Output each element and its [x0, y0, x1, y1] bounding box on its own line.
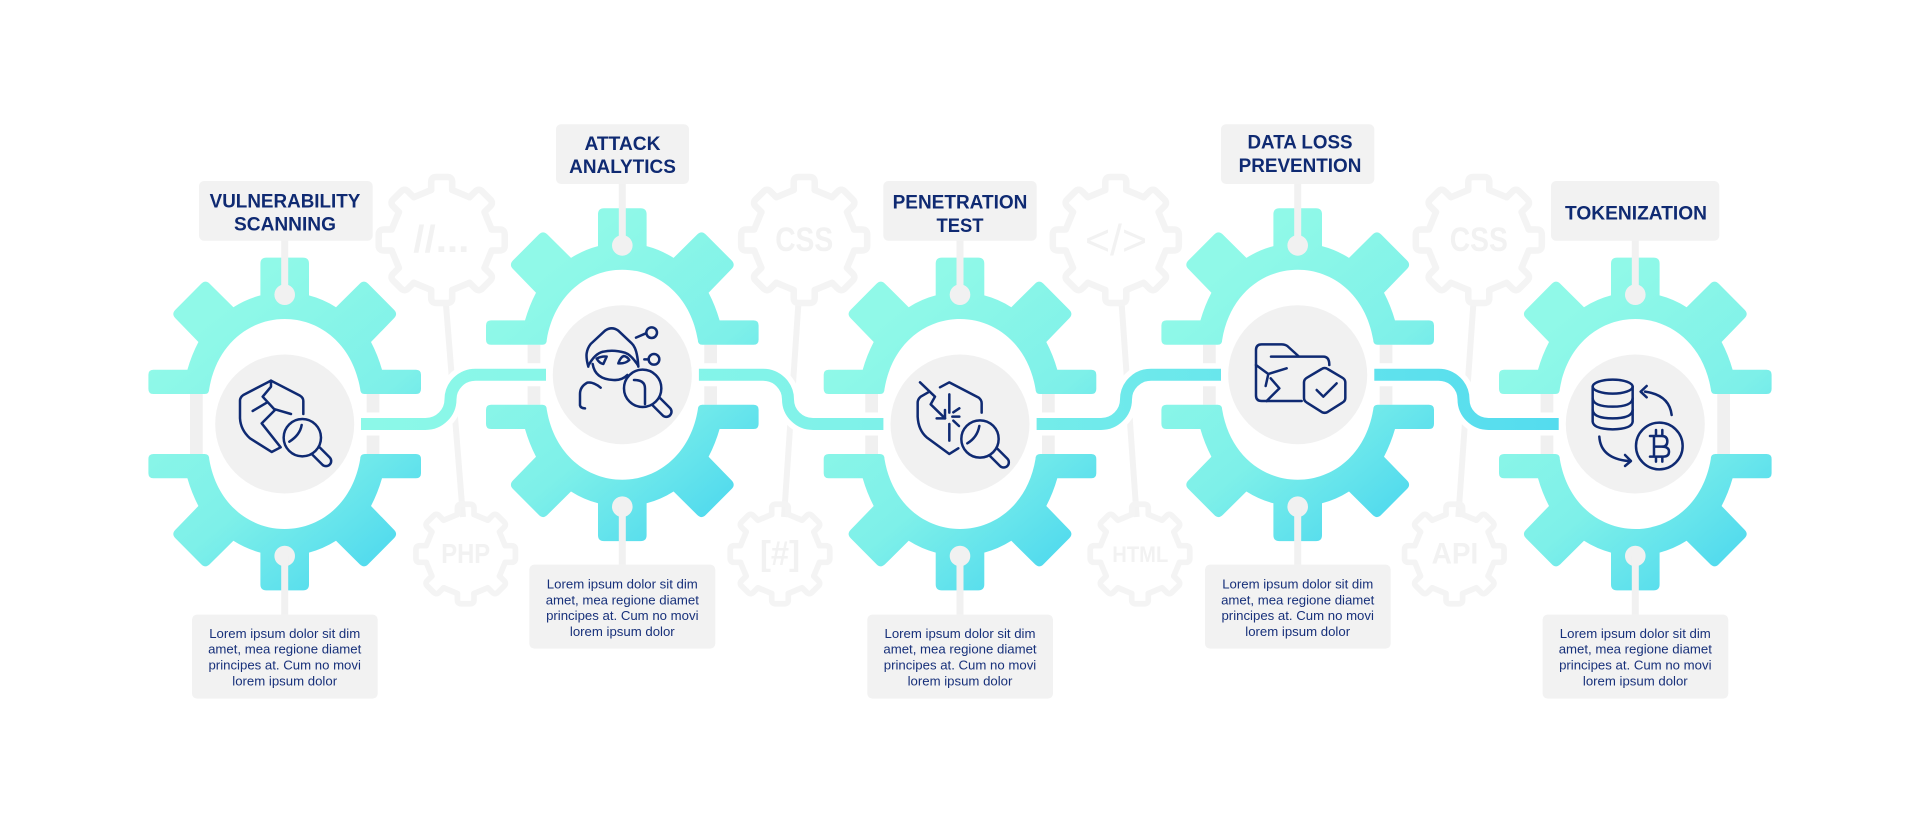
- heading: tokenization: TOKENIZATION: [1565, 203, 1707, 224]
- background gear: API: API: [1432, 538, 1478, 571]
- gear 1 center disc: [215, 354, 354, 494]
- background gear: comment syntax: //...: [413, 219, 469, 261]
- background gear: closing tag: </>: [1085, 216, 1147, 265]
- background gear link 2: [729, 176, 868, 605]
- panel: data loss prevention: [1161, 124, 1434, 649]
- icon: breached shield with magnifier: [918, 382, 1009, 468]
- panel: tokenization: [1499, 181, 1772, 699]
- connector 3 to 4: [1037, 375, 1221, 424]
- gear 3 stems and knobs: [950, 240, 970, 616]
- background gear: HTML: HTML: [1112, 542, 1168, 567]
- background gear link 3: [1052, 176, 1191, 605]
- description 3: principes at. Cum no movi: [884, 657, 1036, 672]
- connectors between gears: [361, 375, 1559, 424]
- description 5: [1543, 615, 1728, 699]
- gear 4 center disc: [1228, 305, 1367, 444]
- background gear: hash: [729, 503, 831, 605]
- connector 2 to 3: [699, 375, 883, 424]
- background gear: CSS: [740, 176, 868, 304]
- heading: attack analytics: ANALYTICS: [569, 157, 676, 178]
- description 3: lorem ipsum dolor: [908, 673, 1013, 688]
- description 1: principes at. Cum no movi: [208, 657, 361, 672]
- description 3: [867, 615, 1053, 699]
- background gear: CSS: CSS: [775, 221, 833, 259]
- heading: tokenization: [1551, 181, 1719, 241]
- description 1: amet, mea regione diamet: [208, 642, 362, 657]
- heading: penetration test: TEST: [936, 216, 984, 237]
- gear 5 stems and knobs: [1625, 240, 1646, 616]
- heading: data loss prevention: DATA LOSS: [1248, 133, 1353, 154]
- icon: hooded hacker with magnifier: [580, 327, 672, 417]
- description 2: [529, 565, 715, 649]
- description 1: lorem ipsum dolor: [232, 673, 338, 688]
- gear 3: [824, 258, 1096, 590]
- background gear: API: [1404, 503, 1505, 605]
- background gear link 4: [1404, 176, 1543, 605]
- gear 1 stems and knobs: [274, 240, 295, 616]
- heading: data loss prevention: PREVENTION: [1239, 156, 1361, 177]
- description 5: principes at. Cum no movi: [1559, 657, 1712, 672]
- description 2: lorem ipsum dolor: [570, 624, 675, 639]
- background gear: PHP: [415, 503, 516, 605]
- description 2: principes at. Cum no movi: [546, 608, 699, 623]
- description 4: lorem ipsum dolor: [1245, 624, 1351, 639]
- gray side stubs: [190, 345, 1730, 454]
- heading: vulnerability scanning: SCANNING: [234, 215, 336, 236]
- description 1: [192, 615, 378, 699]
- background gear: HTML: [1089, 503, 1191, 605]
- description 5: Lorem ipsum dolor sit dim: [1560, 626, 1711, 641]
- description 4: principes at. Cum no movi: [1221, 608, 1374, 623]
- background gear: CSS second: [1415, 176, 1543, 304]
- icon: database and bitcoin exchange: [1593, 380, 1683, 469]
- icon: damaged folder with shield: [1256, 344, 1345, 413]
- gear 2 stems and knobs: [612, 184, 633, 567]
- gear 5: [1499, 258, 1772, 590]
- gear 4: [1161, 208, 1434, 541]
- heading: vulnerability scanning: VULNERABILITY: [210, 192, 360, 212]
- description 2: amet, mea regione diamet: [546, 592, 699, 607]
- description 2: Lorem ipsum dolor sit dim: [547, 577, 698, 592]
- background gear: CSS second: CSS: [1450, 221, 1508, 259]
- background gear: closing tag: [1052, 176, 1180, 304]
- connector 1 to 2: [361, 375, 546, 424]
- heading: data loss prevention: [1221, 124, 1374, 184]
- gear 5 center disc: [1566, 354, 1705, 494]
- gear 4 stems and knobs: [1287, 184, 1308, 567]
- gear 1: [148, 258, 421, 590]
- description 5: lorem ipsum dolor: [1583, 673, 1688, 688]
- description 4: amet, mea regione diamet: [1221, 592, 1375, 607]
- heading: vulnerability scanning: [199, 181, 373, 241]
- description 4: [1205, 565, 1391, 649]
- background gear: PHP: PHP: [441, 538, 490, 569]
- background gear: comment syntax: [377, 176, 506, 304]
- heading: penetration test: PENETRATION: [893, 193, 1027, 214]
- description 5: amet, mea regione diamet: [1559, 642, 1712, 657]
- panel: penetration test: [824, 181, 1096, 699]
- gear 2: [486, 208, 759, 541]
- gear 2 center disc: [553, 305, 692, 444]
- connector 4 to 5: [1374, 375, 1559, 424]
- background gear link 1: [377, 176, 516, 605]
- description 4: Lorem ipsum dolor sit dim: [1222, 577, 1373, 592]
- panel: attack analytics: [486, 124, 759, 649]
- icon: cracked shield with magnifier: [240, 381, 331, 466]
- gear 3 center disc: [890, 354, 1030, 494]
- heading: penetration test: [883, 181, 1037, 241]
- panel: vulnerability scanning: [148, 181, 421, 699]
- connector halos: [361, 375, 1559, 424]
- description 3: amet, mea regione diamet: [883, 642, 1037, 657]
- description 1: Lorem ipsum dolor sit dim: [209, 626, 360, 641]
- description 3: Lorem ipsum dolor sit dim: [885, 626, 1035, 641]
- heading: attack analytics: [556, 124, 689, 184]
- background gear: hash: [#]: [760, 535, 800, 573]
- heading: attack analytics: ATTACK: [584, 134, 661, 155]
